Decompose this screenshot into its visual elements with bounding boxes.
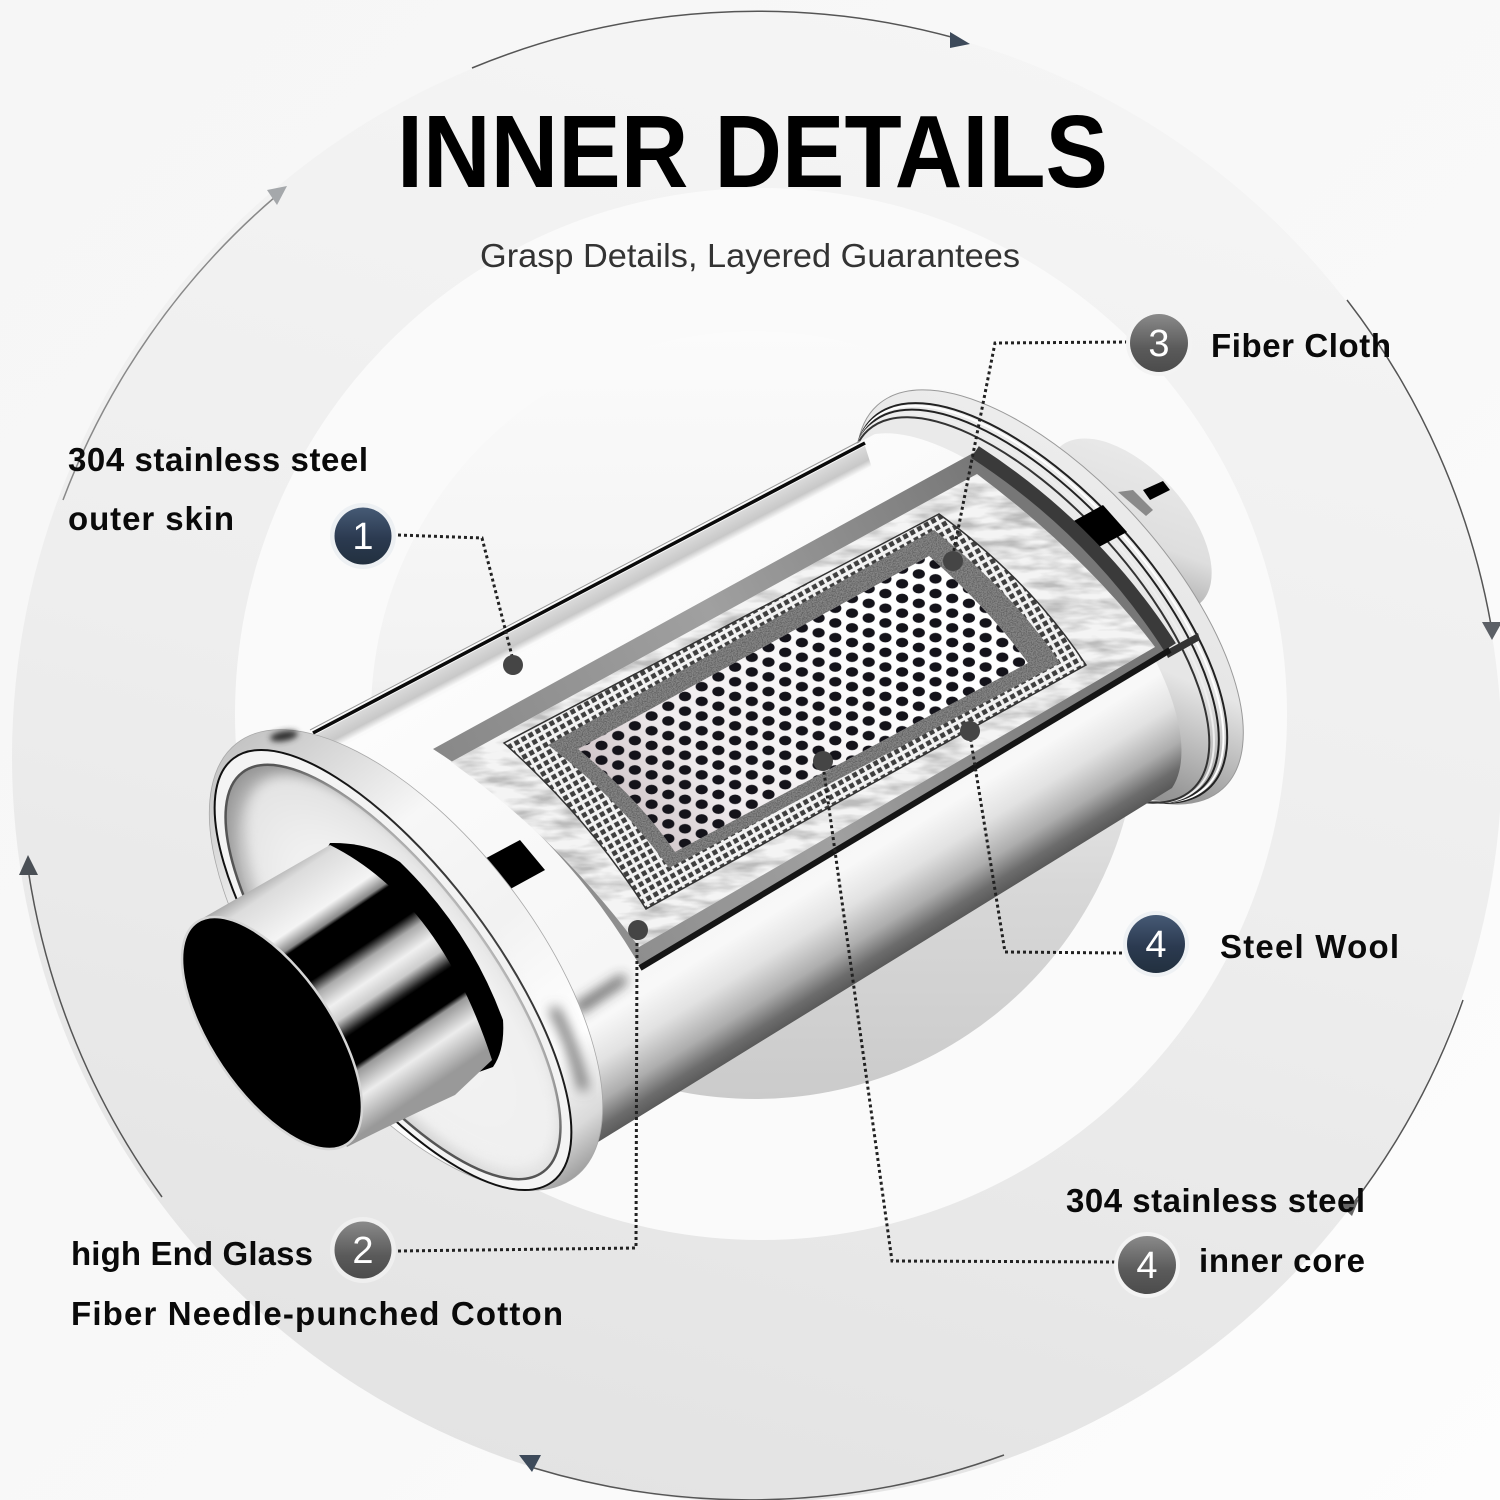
label: needle-punched cotton: [71, 1235, 563, 1332]
muffler illustration: [137, 327, 1310, 1255]
arrow: bottom: [519, 1455, 1004, 1500]
leader 3: [953, 342, 1128, 555]
front flange: [137, 665, 675, 1255]
layer: glass fiber cotton: [451, 474, 1155, 947]
soft dark reflections on body: [572, 633, 1200, 1014]
label: inner core: inner core: [1199, 1242, 1365, 1279]
arrow: right: [1347, 300, 1500, 640]
label: outer skin: 304 stainless steel: [68, 441, 368, 478]
leader 4 inner core: [823, 765, 1115, 1262]
label: fiber cloth: Fiber Cloth: [1211, 327, 1391, 364]
layer: steel wool: [548, 530, 1060, 868]
outlet pipe: [147, 843, 503, 1178]
badge 4 steel wool: 4: [1145, 924, 1167, 966]
badge 1: [330, 503, 396, 569]
title: INNER DETAILS: [397, 94, 1108, 209]
label: needle-punched cotton: high End Glass: [71, 1235, 313, 1272]
leader 2: [398, 935, 637, 1251]
leader 4 steel wool: [970, 735, 1122, 953]
layer: fiber cloth mesh: [504, 514, 1086, 909]
arrow: top: [472, 11, 970, 68]
label: outer skin: [68, 441, 368, 537]
rear outlet stub: [1018, 409, 1242, 641]
badge 4 inner core: 4: [1136, 1245, 1158, 1287]
anchor dots: [503, 551, 980, 940]
cut-away frame: [433, 452, 1170, 968]
label: inner core: 304 stainless steel: [1066, 1182, 1365, 1219]
subtitle: Grasp Details, Layered Guarantees: [480, 237, 1020, 274]
badge 4 inner core: [1114, 1232, 1180, 1298]
badge 2: 2: [352, 1230, 374, 1272]
badge 2: [330, 1217, 396, 1283]
black reflection bars: [440, 505, 1127, 910]
label: steel wool: Steel Wool: [1220, 928, 1399, 965]
rear flange ring: [790, 327, 1310, 867]
label: inner core: [1066, 1182, 1365, 1279]
top edge highlight and band: [310, 441, 872, 758]
arrow: lower right: [1340, 1000, 1463, 1216]
leader 1: [398, 535, 513, 660]
badge 3: 3: [1148, 323, 1170, 365]
arrow: left: [19, 855, 162, 1197]
label: needle-punched cotton: Fiber Needle-punched Cotton: [71, 1295, 563, 1332]
badge 4 steel wool: [1123, 911, 1189, 977]
badge 3: [1126, 310, 1192, 376]
badge 1: 1: [352, 516, 374, 558]
steel body: [310, 433, 1181, 1147]
label: outer skin: outer skin: [68, 500, 234, 537]
arrow: upper left: [63, 186, 287, 500]
layer: perforated inner core: [578, 556, 1028, 852]
